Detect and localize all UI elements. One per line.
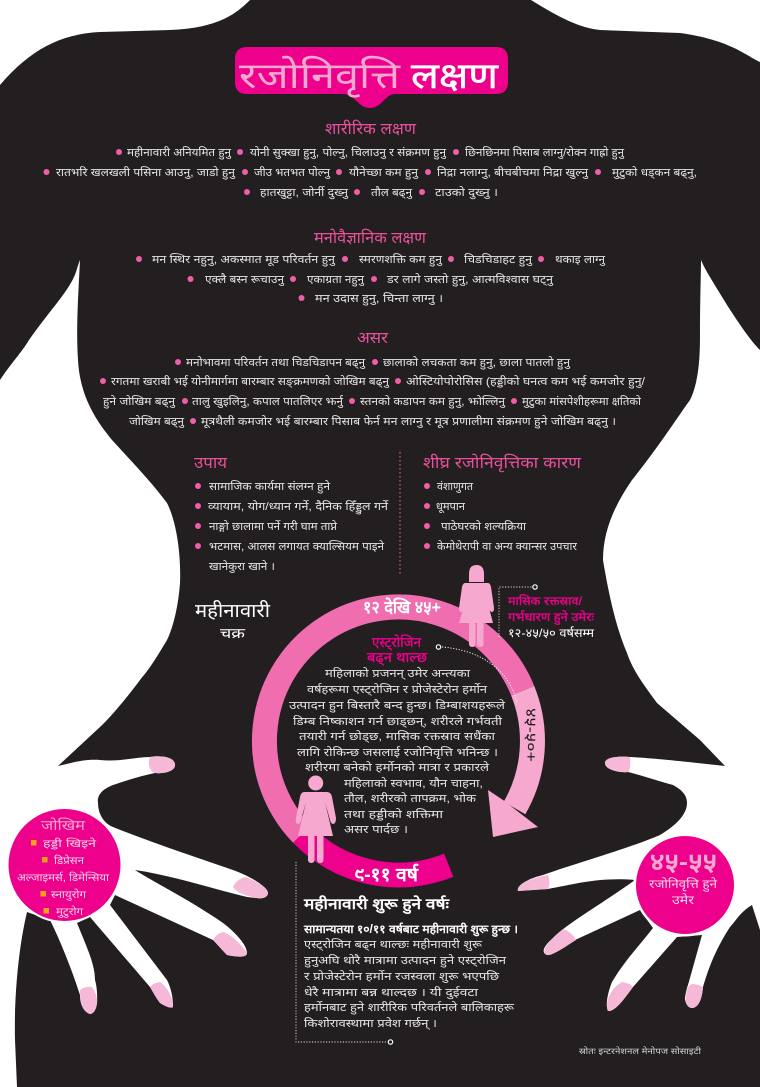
text block: menarche <box>303 895 518 1030</box>
text block: psychological symptoms: मन उदास हुनु, चिन्ता लाग्नु । <box>315 292 443 306</box>
text block: effects: ओस्टियोपोरोसिस (हड्डीको घनत्व कम भई कमजोर हुनु/ <box>406 375 646 389</box>
source: स्रोतः इन्टरनेशनल मेनोपज सोसाइटी <box>579 1046 702 1056</box>
text block: psychological symptoms: डर लागे जस्तो हुनु, आत्मविश्वास घट्नु <box>386 273 554 287</box>
cycle ring <box>264 607 538 875</box>
panel: causes of early menopause <box>423 453 581 553</box>
callout: menstruation age <box>499 585 595 640</box>
panel: remedies: भटमास, आलस लगायत क्याल्सियम पाइने <box>209 540 385 553</box>
text block: effects: छालाको लचकता कम हुनु, छाला पातलो हुनु <box>383 356 571 370</box>
text block: psychological symptoms <box>136 253 606 306</box>
heading: menstrual cycle: महीनावारी <box>195 599 271 622</box>
text block: effects: तालु खुइलिनु, कपाल पातलिएर झर्नु <box>192 395 344 408</box>
text block: effects <box>100 356 646 429</box>
panel: remedies: नाङ्गो छालामा पर्ने गरी घाम ताप्ने <box>209 520 338 533</box>
text block: physical symptoms: छिनछिनमा पिसाब लाग्नु/रोक्न गाह्रो हुनु <box>465 146 625 160</box>
menopause age circle: उमेर <box>672 893 695 907</box>
text block: physical symptoms <box>44 146 697 200</box>
text block: effects: हुने जोखिम बढ्नु <box>103 395 176 409</box>
estrogen text block: लागि रोकिन्छ जसलाई रजोनिवृत्ति भनिन्छ । <box>297 746 498 759</box>
panel: remedies: उपाय <box>194 455 228 472</box>
risk circle: जोखिम <box>41 817 86 833</box>
text block: menarche: हुनुअघि थोरै मात्रामा उत्पादन हुने एस्ट्रोजिन <box>304 954 507 968</box>
title banner <box>235 47 508 108</box>
estrogen text block: उत्पादन हुन बिस्तारै बन्द हुन्छ। डिम्बाशयहरूले <box>289 699 506 713</box>
panel: causes of early menopause: पाठेघरको शल्यक्रिया <box>441 520 526 533</box>
text block: effects: मूत्रथैली कमजोर भई बारम्बार पिसाब फेर्न मन लाग्नु र मूत्र प्रणालीमा संक्रमण हुने जोखिम बढ्नु । <box>201 415 616 429</box>
text block: physical symptoms: यौनेच्छा कम हुनु <box>349 166 419 180</box>
risk circle: हड्डी खिइने <box>43 837 96 850</box>
estrogen text block: तथा हड्डीको शक्तिमा <box>344 808 443 821</box>
text block: effects: मुटुका मांसपेशीहरूमा क्षतिको <box>522 395 641 408</box>
panel: remedies: व्यायाम, योग/ध्यान गर्ने, दैनिक हिँड्डुल गर्ने <box>208 500 389 515</box>
panel: causes of early menopause: धूमपान <box>436 501 466 514</box>
icon: woman bottom <box>296 776 336 863</box>
risk circle <box>6 807 122 923</box>
text block: effects: स्तनको कडापन कम हुनु, झोल्लिनु <box>360 395 506 409</box>
text block: psychological symptoms: स्मरणशक्ति कम हुनु <box>359 253 443 267</box>
heading: psychological symptoms: मनोवैज्ञानिक लक्षण <box>314 228 426 247</box>
text block: physical symptoms: योनी सुक्खा हुनु, पोल्नु, चिलाउनु र संक्रमण हुनु <box>250 146 447 160</box>
text block: menarche: सामान्यतया १०/११ वर्षबाट महीनावारी शुरू हुन्छ । <box>303 922 518 937</box>
text block: physical symptoms: महीनावारी अनियमित हुनु <box>127 146 232 160</box>
panel: remedies: खानेकुरा खाने । <box>209 560 275 573</box>
estrogen text block: वर्षहरूमा एस्ट्रोजिन र प्रोजेस्टेरोन हर्मोन <box>307 683 488 696</box>
text block: psychological symptoms: एकाग्रता नहुनु <box>307 274 365 287</box>
panel: causes of early menopause: केमोथेरापी वा अन्य क्यान्सर उपचार <box>437 540 577 553</box>
text block: physical symptoms: रातभरि खलखली पसिना आउनु, जाडो हुनु <box>56 166 236 180</box>
ring label: 12 to 45+: १२ देखि ४५+ <box>363 597 441 617</box>
text block: physical symptoms: तौल बढ्नु <box>371 186 413 199</box>
text block: menarche: किशोरावस्थामा प्रवेश गर्छन् । <box>304 1017 437 1030</box>
risk circle: स्नायुरोग <box>51 888 87 901</box>
title banner: लक्षण <box>411 55 499 96</box>
callout: menstruation age: मासिक रक्तस्राव/ <box>508 594 583 608</box>
text block: physical symptoms: मुटुको धड्कन बढ्नु, <box>612 166 697 179</box>
estrogen text block: असर पार्दछ । <box>344 823 408 836</box>
estrogen text block: एस्ट्रोजिन <box>372 634 421 651</box>
ring label: 45-50+: ४५-५०+ <box>522 708 539 762</box>
text block: menarche: एस्ट्रोजिन बढ्न थाल्छः महीनावारी शुरू <box>304 938 483 951</box>
text block: physical symptoms: निद्रा नलाग्नु, बीचबीचमा निद्रा खुल्नु <box>437 166 589 179</box>
callout: menstruation age: गर्भधारण हुने उमेरः <box>508 610 595 625</box>
panel: remedies: सामाजिक कार्यमा संलग्न हुने <box>209 480 331 494</box>
title banner: रजोनिवृत्ति <box>239 55 401 98</box>
heading: physical symptoms: शारीरिक लक्षण <box>325 119 416 138</box>
heading: menstrual cycle: चक्र <box>220 625 245 641</box>
estrogen text block: शरीरमा बनेको हर्मोनको मात्रा र प्रकारले <box>305 761 490 774</box>
text block: psychological symptoms: मन स्थिर नहुनु, अकस्मात मूड परिवर्तन हुनु <box>152 253 336 267</box>
text block: menarche: धेरै मात्रामा बन्न थाल्दछ । यी दुईवटा <box>304 986 478 1000</box>
fingernails <box>80 756 703 1014</box>
estrogen text block: तयारी गर्न छोड्छ, मासिक रक्तस्राव सधैंका <box>299 730 495 743</box>
text block: physical symptoms: जीउ भतभत पोल्नु <box>254 166 331 179</box>
estrogen text block: तौल, शरीरको तापक्रम, भोक <box>344 792 477 805</box>
panel: causes of early menopause: वंशाणुगत <box>437 480 474 493</box>
dotted connector: estrogen <box>436 645 517 703</box>
text block: effects: मनोभावमा परिवर्तन तथा चिडचिडापन बढ्नु <box>186 356 366 369</box>
ring label: 9-11 years: ९-११ वर्ष <box>354 863 419 886</box>
icon: woman top <box>459 565 494 647</box>
menopause age circle: रजोनिवृत्ति हुने <box>649 877 717 892</box>
text block: psychological symptoms: थकाइ लाग्नु <box>555 254 606 266</box>
menopause age circle: ४५-५५ <box>650 849 717 876</box>
dotted connector: onset <box>296 862 393 1044</box>
estrogen text block: डिम्ब निष्काशन गर्न छाड्छन्, शरीरले गर्भवती <box>293 715 502 728</box>
risk circle: अल्जाइमर्स, डिमेन्सिया <box>17 871 109 884</box>
risk circle: मुटुरोग <box>56 905 84 918</box>
heading: menstrual cycle <box>195 599 271 641</box>
callout: menstruation age: १२-४५/५० वर्षसम्म <box>508 626 595 640</box>
panel: causes of early menopause: शीघ्र रजोनिवृत्तिका कारण <box>423 453 581 473</box>
text block: effects: रगतमा खराबी भई योनीमार्गमा बारम्बार सङ्क्रमणको जोखिम बढ्नु <box>111 375 390 388</box>
menopause age circle <box>634 834 736 936</box>
estrogen text block: महिलाको स्वभाव, यौन चाहना, <box>344 777 483 790</box>
risk circle: डिप्रेसन <box>54 854 84 867</box>
estrogen text block: महिलाको प्रजनन् उमेर अन्त्यका <box>325 667 470 680</box>
text block: psychological symptoms: चिडचिडाहट हुनु <box>464 253 533 267</box>
panel: remedies <box>194 455 389 573</box>
text block: menarche: र प्रोजेस्टेरोन हर्मोन रजस्वला शुरू भएपछि <box>304 970 499 983</box>
estrogen text block <box>289 634 506 836</box>
text block: effects: जोखिम बढ्नु <box>129 415 185 428</box>
text block: physical symptoms: टाउको दुख्नु । <box>435 186 498 200</box>
text block: psychological symptoms: एक्लै बस्न रूचाउनु <box>205 273 285 286</box>
text block: menarche: महीनावारी शुरू हुने वर्षः <box>303 895 450 915</box>
text block: menarche: हर्मोनबाट हुने शारीरिक परिवर्तनले बालिकाहरू <box>304 1001 515 1015</box>
heading: effects: असर <box>357 330 388 347</box>
text block: physical symptoms: हातखुट्टा, जोर्नी दुख्नु <box>260 186 349 200</box>
estrogen text block: बढ्न थाल्छ <box>367 649 428 666</box>
